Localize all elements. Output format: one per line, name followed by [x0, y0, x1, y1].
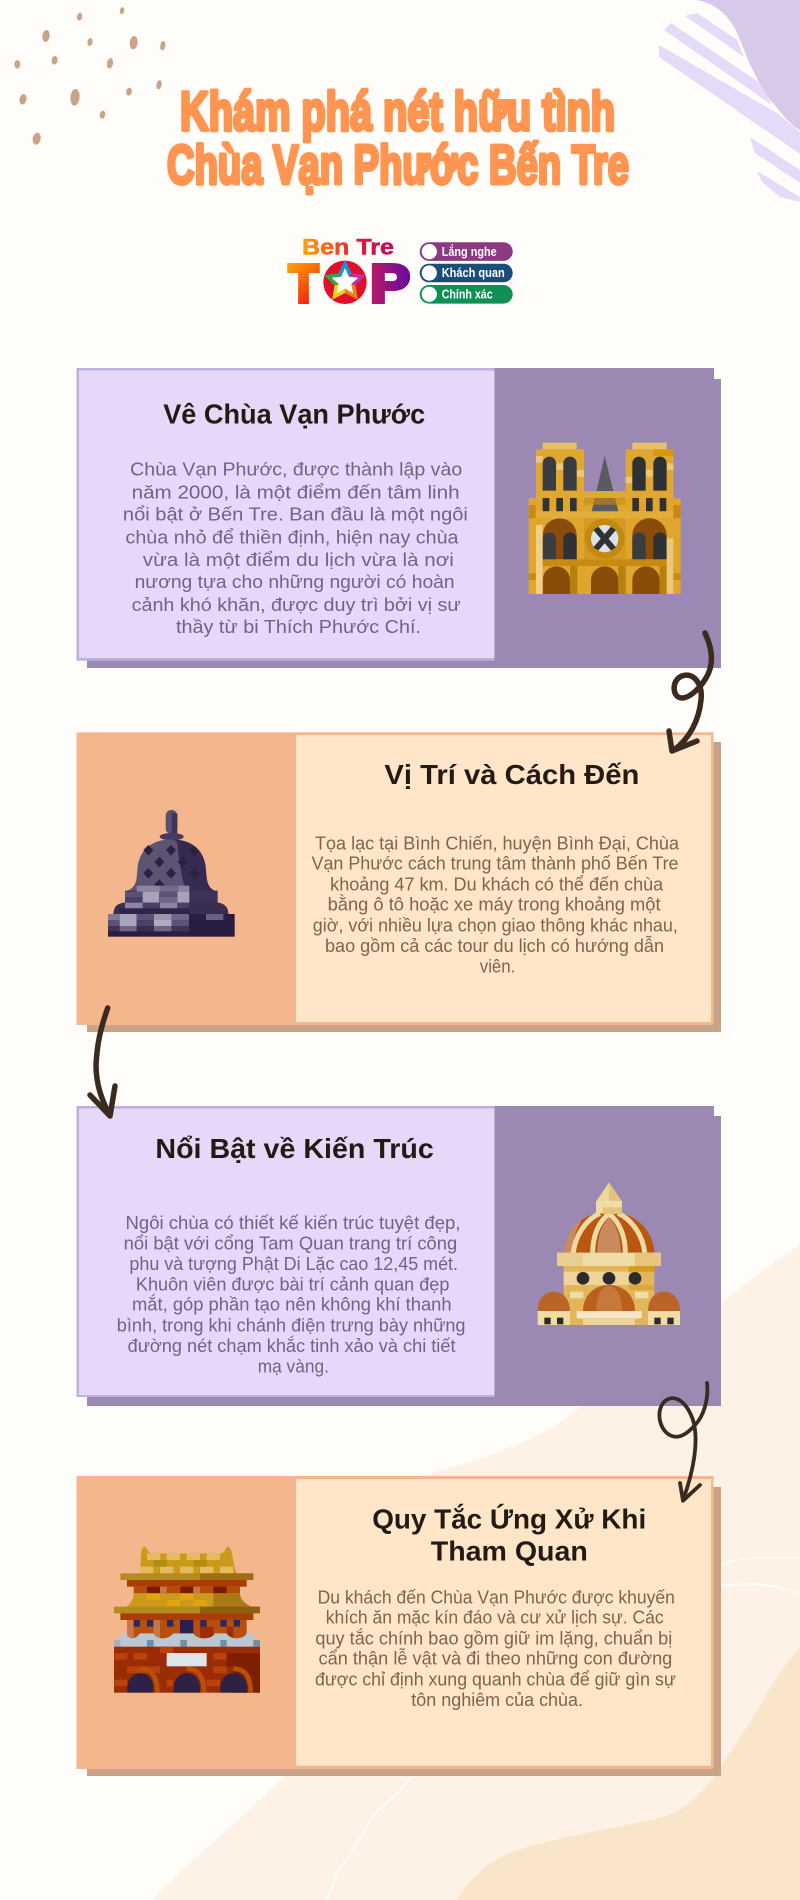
text block: architecture: nổi bật với cổng Tam Quan trang trí công — [124, 1233, 457, 1253]
text block: visitor etiquette: tôn nghiêm của chùa. — [411, 1690, 583, 1710]
text block: architecture: đường nét chạm khắc tinh xảo và chi tiết — [128, 1335, 455, 1356]
icon: cathedral — [529, 443, 681, 594]
logo: Ben Tre TOP — [288, 234, 410, 314]
logo badge: Khách quan: Khách quan — [442, 266, 505, 280]
arrow: panel 3 to panel 4 — [659, 1383, 707, 1501]
logo: Ben Tre TOP: Ben Tre — [302, 234, 394, 259]
text block: architecture: mạ vàng. — [258, 1356, 329, 1376]
text block: visitor etiquette: được chỉ định xung quanh chùa để giữ gìn sự — [315, 1669, 676, 1689]
text block: location and access — [312, 833, 680, 976]
text block: about the pagoda — [123, 459, 468, 637]
text block: about the pagoda: cảnh khó khăn, được duy trì bởi vị sư — [132, 595, 461, 615]
text block: visitor etiquette: cẩn thận lễ vật và đi theo những con đường — [318, 1648, 672, 1669]
text block: location and access: khoảng 47 km. Du khách có thể đến chùa — [330, 874, 664, 894]
text block: architecture: mắt, góp phần tạo nên không khí thanh — [132, 1294, 452, 1315]
text block: architecture: Khuôn viên được bài trí cảnh quan đẹp — [136, 1274, 449, 1294]
text block: architecture: Ngôi chùa có thiết kế kiến trúc tuyệt đẹp, — [126, 1213, 460, 1233]
text block: visitor etiquette — [315, 1587, 676, 1710]
heading: Quy Tắc Ứng Xử Khi Tham Quan: Quy Tắc Ứng Xử Khi — [372, 1503, 646, 1534]
arrow: panel 2 to panel 3 — [90, 1008, 115, 1116]
logo badge: Lắng nghe — [420, 242, 513, 261]
background: pale wave bottom right — [153, 1245, 800, 1900]
text block: architecture — [117, 1213, 466, 1376]
logo badge: Khách quan — [420, 264, 513, 282]
title: Khám phá nét hữu tình — [180, 80, 615, 142]
text block: visitor etiquette: quy tắc chính bao gồm giữ im lặng, chuẩn bị — [315, 1627, 672, 1648]
decoration: top-right purple blob and stripes — [659, 0, 800, 202]
background: white curved lines — [327, 1558, 800, 1900]
text block: location and access: Tọa lạc tại Bình Chiến, huyện Bình Đại, Chùa — [315, 833, 680, 853]
heading: Quy Tắc Ứng Xử Khi Tham Quan: Tham Quan — [431, 1535, 588, 1566]
icon: palace gate — [114, 1547, 260, 1693]
text block: about the pagoda: nương tựa cho những người có hoàn — [135, 572, 455, 592]
arrow: panel 1 to panel 2 — [669, 633, 712, 751]
logo: Ben Tre TOP: T — [288, 254, 318, 314]
panel: Quy Tắc Ứng Xử Khi Tham Quan — [76, 1476, 721, 1776]
heading: Nổi Bật về Kiến Trúc: Nổi Bật về Kiến Trúc — [155, 1133, 434, 1164]
text block: location and access: bằng ô tô hoặc xe máy trong khoảng một — [328, 894, 661, 915]
text block: about the pagoda: chùa nhỏ để thiền định, hiện nay chùa — [126, 528, 460, 548]
logo badge: Lắng nghe: Lắng nghe — [442, 244, 497, 259]
heading: Quy Tắc Ứng Xử Khi Tham Quan — [372, 1503, 646, 1566]
background: darker wave bottom right — [457, 1647, 800, 1900]
icon: domed church — [538, 1182, 680, 1325]
decoration: top-left scattered dots — [14, 7, 166, 145]
title — [167, 80, 629, 196]
panel: Vị Trí và Cách Đến — [76, 732, 721, 1032]
text block: location and access: Vạn Phước cách trung tâm thành phố Bến Tre — [312, 854, 678, 874]
heading: Vê Chùa Vạn Phước: Vê Chùa Vạn Phước — [163, 398, 425, 429]
logo badge: Chính xác: Chính xác — [442, 288, 493, 302]
text block: about the pagoda: thầy từ bi Thích Phước Chí. — [176, 617, 421, 637]
text block: visitor etiquette: khích ăn mặc kín đáo và cư xử lịch sự. Các — [326, 1608, 664, 1628]
text block: location and access: giờ, với nhiều lựa chọn giao thông khác nhau, — [313, 915, 678, 935]
text block: architecture: phu và tượng Phật Di Lặc cao 12,45 mét. — [129, 1254, 458, 1274]
text block: visitor etiquette: Du khách đến Chùa Vạn Phước được khuyến — [318, 1587, 675, 1607]
panel: Về Chùa Vạn Phước — [76, 368, 721, 668]
panel: Nổi Bật về Kiến Trúc — [76, 1106, 721, 1406]
logo badge: Chính xác — [420, 285, 513, 304]
text block: about the pagoda: nổi bật ở Bến Tre. Ban đầu là một ngôi — [123, 505, 468, 525]
text block: location and access: viên. — [480, 956, 515, 976]
logo: Ben Tre TOP: P — [370, 254, 410, 314]
icon: stupa bell — [108, 810, 235, 937]
text block: architecture: bình, trong khi chánh điện trưng bày những — [117, 1316, 466, 1336]
text block: about the pagoda: vừa là một điểm du lịch vừa là nơi — [143, 550, 454, 570]
text block: about the pagoda: Chùa Vạn Phước, được thành lập vào — [130, 459, 462, 479]
text block: location and access: bao gồm cả các tour du lịch có hướng dẫn — [325, 935, 664, 956]
text block: about the pagoda: năm 2000, là một điểm đến tâm linh — [132, 482, 460, 502]
heading: Vị Trí và Cách Đến: Vị Trí và Cách Đến — [384, 759, 639, 790]
